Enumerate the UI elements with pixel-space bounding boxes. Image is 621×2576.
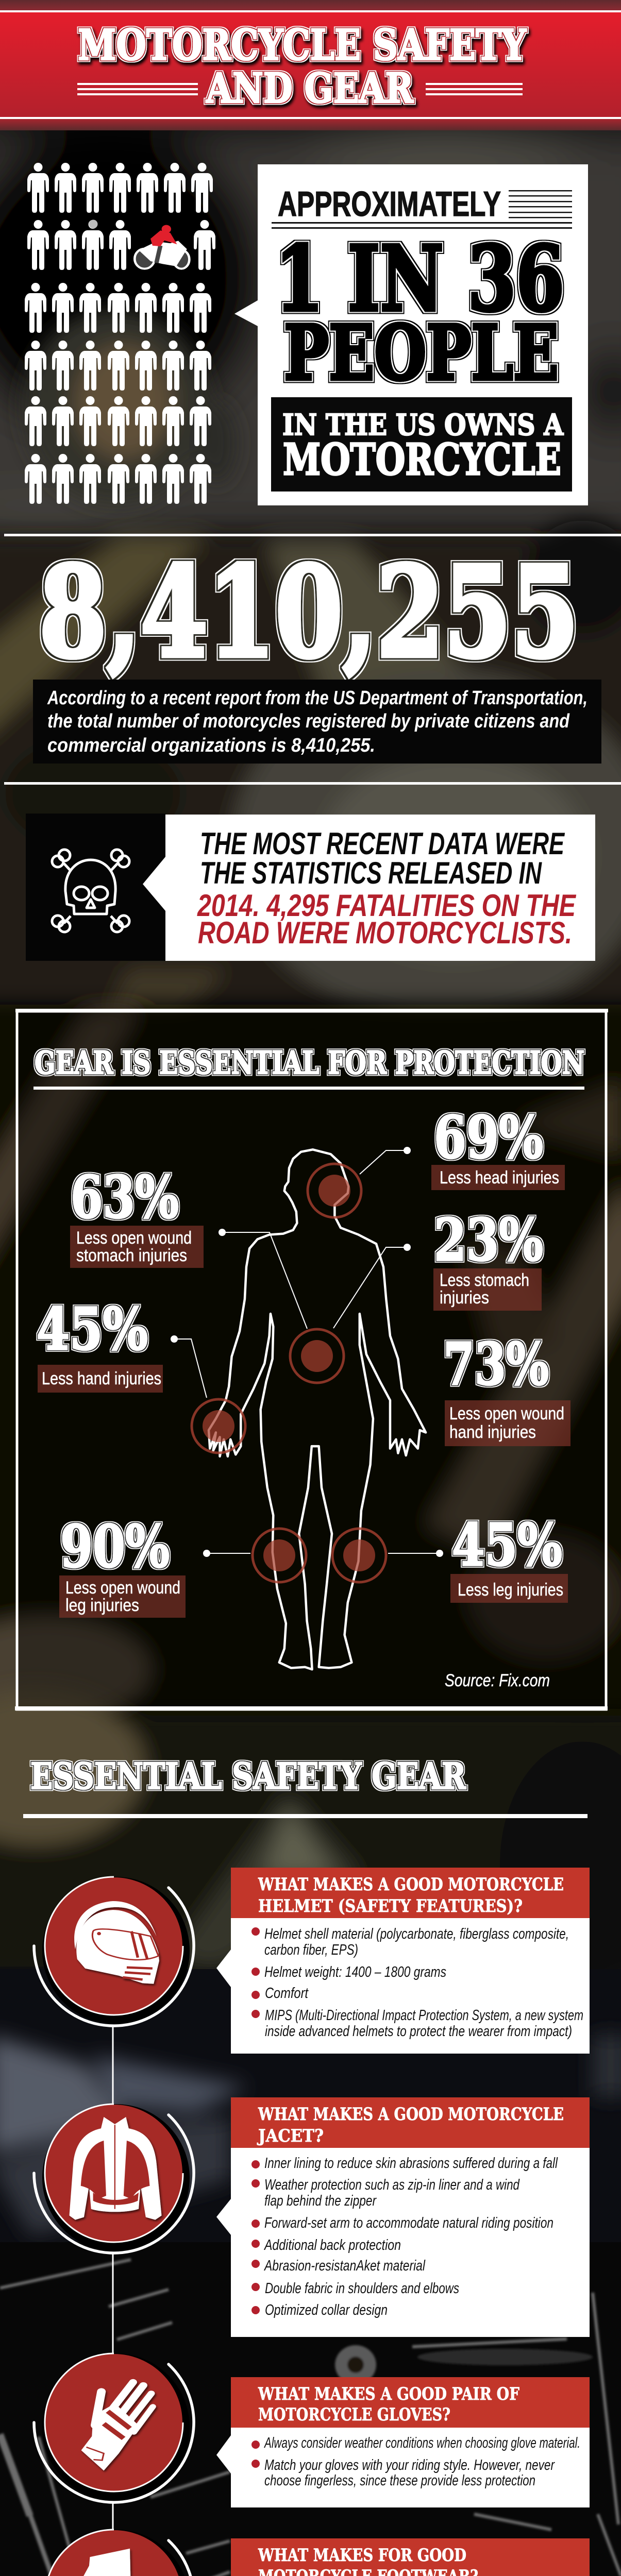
panel: gear is essential for protection (15, 1009, 608, 1710)
stat: 90% leg wound: Less open wound (65, 1578, 180, 1598)
stripes (272, 190, 572, 229)
callout: 1 in 36 people: PEOPLE (284, 309, 559, 397)
stat: 69% head: Less head injuries (440, 1168, 559, 1188)
bullets (251, 1927, 260, 2018)
bullets (251, 2441, 260, 2468)
stat: 73% hand (443, 1331, 570, 1446)
stat: 73% hand: hand injuries (449, 1422, 536, 1442)
connectors (112, 2026, 113, 2530)
stat: 45% leg: Less leg injuries (458, 1580, 563, 1600)
stat: 45% leg: 45% (452, 1512, 562, 1579)
card: helmet: Comfort (265, 1985, 309, 2002)
heading: essential safety gear: ESSENTIAL SAFETY GEAR (30, 1755, 466, 1798)
stat: 63% stomach wound (70, 1164, 204, 1268)
card: helmet: carbon fiber, EPS) (264, 1942, 358, 1958)
card: gloves (216, 2377, 590, 2507)
card: helmet: Helmet weight: 1400 – 1800 grams (264, 1964, 446, 1980)
body outline (209, 1149, 426, 1669)
card: gloves: MOTORCYCLE GLOVES? (258, 2404, 450, 2425)
icon: helmet badge (34, 1877, 194, 2026)
stat: 23% stomach (433, 1207, 543, 1311)
card: jacket: Abrasion-resistanAket material (263, 2258, 426, 2274)
black caption box: IN THE US OWNS A (282, 408, 564, 442)
callout: 1 in 36 people (234, 164, 588, 505)
card: helmet: HELMET (SAFETY FEATURES)? (258, 1896, 523, 1917)
icon: boot badge (34, 2530, 194, 2576)
icon: skull and crossbones (52, 850, 129, 932)
stat: 23% stomach: 23% (434, 1207, 543, 1274)
icon: motorcycle rider (135, 225, 189, 269)
card: helmet (216, 1868, 590, 2054)
icon: gloves badge (34, 2353, 194, 2502)
injury markers (192, 1164, 386, 1582)
card: jacket: Weather protection such as zip-in liner and a wind (264, 2177, 520, 2193)
stat: 45% hand: Less hand injuries (42, 1369, 161, 1388)
card: jacket (216, 2097, 590, 2337)
card: jacket: Additional back protection (263, 2237, 401, 2253)
title side stripes (77, 83, 523, 95)
pictogram of people with motorcyclist (25, 163, 215, 504)
source: Source: Fix.com (445, 1671, 550, 1690)
stat: 90% leg wound: 90% (60, 1513, 170, 1581)
text block: registered motorcycles: commercial organizations is 8,410,255. (47, 735, 375, 756)
card: jacket: Double fabric in shoulders and elbows (265, 2280, 459, 2297)
stat: 23% stomach: Less stomach (440, 1270, 529, 1290)
card: footwear: WHAT MAKES FOR GOOD (258, 2545, 466, 2566)
title (78, 21, 527, 112)
stat: 63% stomach wound: Less open wound (76, 1228, 192, 1248)
text: fatalities statement (197, 826, 577, 950)
stat: 23% stomach: injuries (440, 1288, 489, 1308)
card: jacket: flap behind the zipper (264, 2193, 377, 2209)
bullets (251, 2160, 260, 2314)
title: AND GEAR (206, 64, 413, 112)
stat: 45% leg (450, 1512, 568, 1603)
text block: registered motorcycles (33, 680, 601, 764)
heading: essential safety gear (23, 1755, 588, 1818)
stat: 45% hand (37, 1296, 163, 1393)
card: footwear (216, 2538, 590, 2576)
title: MOTORCYCLE SAFETY (78, 21, 527, 70)
card: jacket: JACET? (257, 2126, 324, 2146)
black caption box (271, 397, 572, 492)
card: jacket: Optimized collar design (265, 2302, 388, 2318)
stat: 90% leg wound (59, 1513, 186, 1618)
panel: fatalities (26, 814, 595, 961)
stat: 63% stomach wound: 63% (71, 1164, 179, 1231)
leader lines (174, 1150, 440, 1553)
stat: 90% leg wound: leg injuries (65, 1596, 139, 1615)
header banner (0, 0, 621, 130)
callout: 1 in 36 people: APPROXIMATELY (278, 184, 501, 224)
icon: jacket badge (34, 2104, 194, 2253)
card: gloves: choose fingerless, since these provide less protection (264, 2472, 535, 2489)
stat: 69% head: 69% (434, 1104, 543, 1172)
stat: 63% stomach wound: stomach injuries (76, 1246, 187, 1265)
card: gloves: WHAT MAKES A GOOD PAIR OF (258, 2384, 519, 2404)
stat: 73% hand: Less open wound (449, 1404, 564, 1423)
stat: 73% hand: 73% (443, 1331, 549, 1398)
stat: 45% hand: 45% (37, 1296, 148, 1363)
